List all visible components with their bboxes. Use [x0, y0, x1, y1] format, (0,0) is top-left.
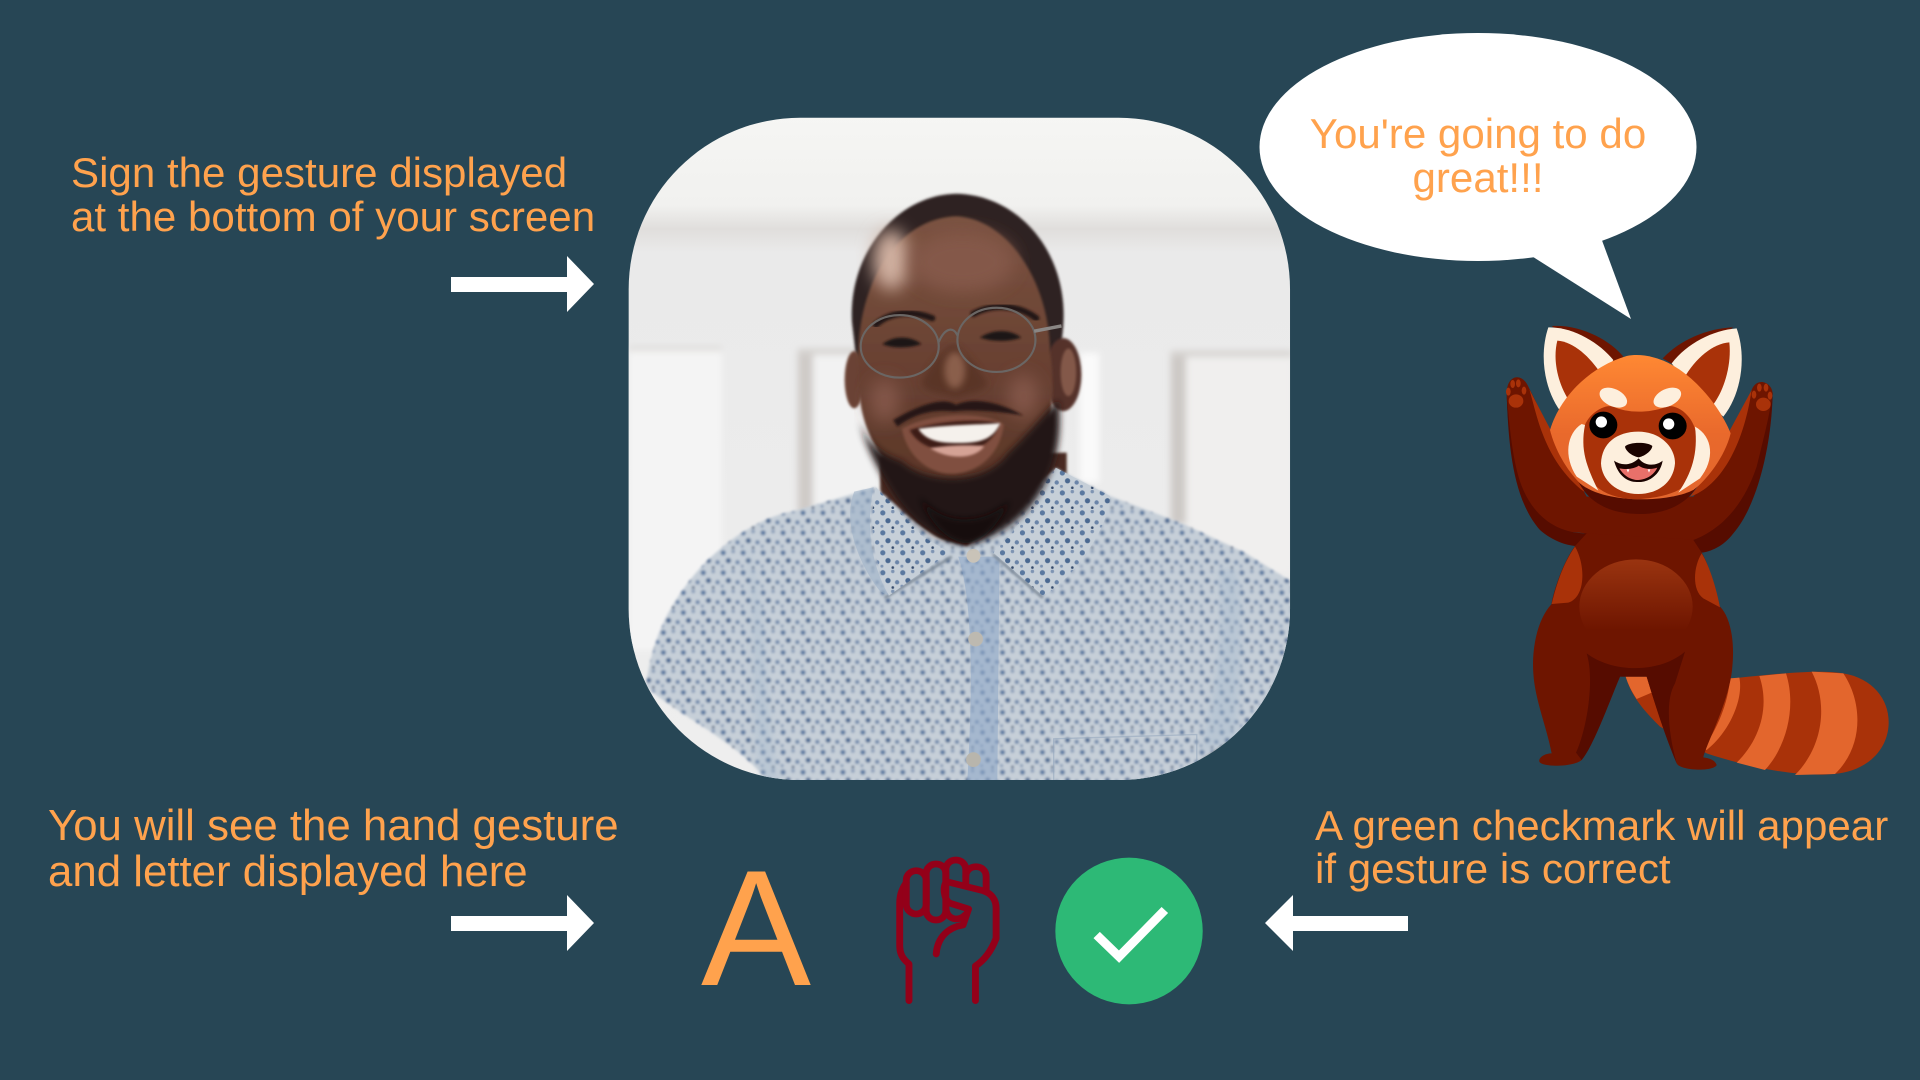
- instruction text: green checkmark: if gesture is correct: [1315, 845, 1671, 892]
- moustache: [893, 401, 1023, 427]
- panda ears: [1544, 326, 1742, 417]
- buttons: [967, 549, 980, 563]
- arrow: to video: [451, 256, 594, 312]
- panda tail: [1626, 672, 1889, 775]
- arrow: to checkmark: [1265, 895, 1408, 951]
- instruction text: sign the gesture: at the bottom of your screen: [71, 193, 595, 240]
- icon: fist hand sign: [900, 860, 996, 1001]
- arrow: to letter and gesture: [451, 895, 594, 951]
- speech bubble text: You're going to do: [1310, 110, 1646, 157]
- glasses: [861, 308, 1061, 378]
- neck: [880, 453, 1067, 557]
- speech bubble text: great!!!: [1412, 154, 1544, 201]
- head: [845, 194, 1081, 544]
- red panda mascot: [1506, 326, 1889, 775]
- panda eyes: [1589, 412, 1617, 438]
- eyebrows and eyes: [876, 313, 932, 325]
- nose: [924, 346, 986, 396]
- panda body and legs: [1533, 530, 1733, 770]
- beard: [860, 401, 1060, 544]
- collar: [885, 557, 952, 598]
- shirt: [646, 468, 1297, 787]
- speech bubble: [1260, 33, 1696, 319]
- mouth: [902, 415, 1004, 474]
- panda arms: [1506, 377, 1773, 553]
- letter A: A: [701, 836, 811, 1020]
- instruction text: sign the gesture: Sign the gesture displayed: [71, 149, 567, 196]
- panda mouth: [1614, 458, 1663, 482]
- instruction text: green checkmark: A green checkmark will appear: [1315, 802, 1888, 849]
- panda nose: [1625, 443, 1652, 457]
- instruction text: hand gesture and letter: and letter displayed here: [48, 847, 528, 896]
- photo: smiling man on video: [620, 110, 1300, 790]
- icon: green checkmark: [1055, 858, 1203, 1004]
- instruction text: hand gesture and letter: You will see the hand gesture: [48, 801, 619, 850]
- panda head: [1550, 355, 1731, 514]
